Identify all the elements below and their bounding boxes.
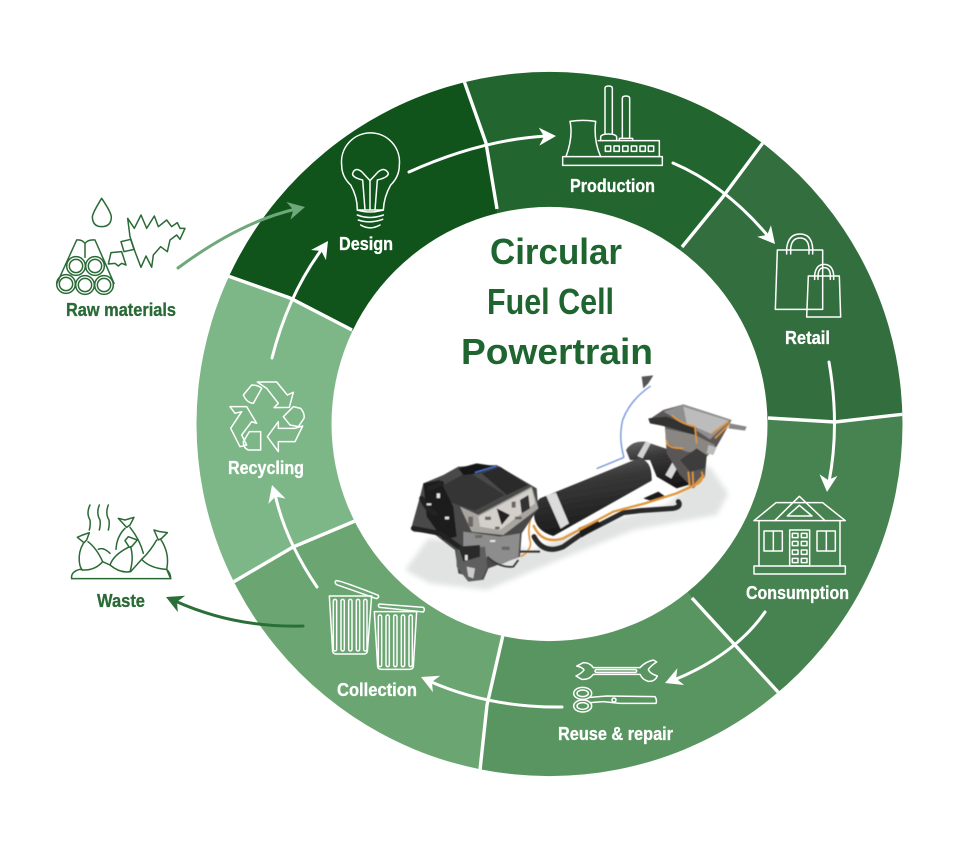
icon: house <box>754 496 845 574</box>
arrow: design to production <box>409 127 556 172</box>
label: waste: Waste <box>97 591 145 611</box>
segment: collection <box>234 521 502 770</box>
label: production: Production <box>570 176 655 196</box>
arrow: collection to recycling <box>263 482 317 587</box>
icon: waste bags <box>72 505 171 579</box>
title: Fuel Cell <box>487 281 614 322</box>
arrow: production to retail <box>673 163 782 250</box>
stage: production <box>563 86 662 196</box>
icon: trash bins <box>329 581 424 669</box>
fuel cell powertrain illustration <box>405 375 747 590</box>
stage: collection <box>329 581 424 700</box>
arrow: recycling to design <box>272 236 335 358</box>
icon: recycling symbol <box>230 382 304 452</box>
stage: raw materials <box>57 198 185 320</box>
segment: reuse and repair <box>480 592 778 776</box>
label: raw materials: Raw materials <box>66 300 176 320</box>
engine mass <box>412 465 538 580</box>
icon: raw materials <box>57 198 185 294</box>
arrow: raw materials to design <box>178 198 307 268</box>
icon: wrench and scissors <box>574 660 657 712</box>
icon: factory <box>563 86 662 165</box>
label: collection: Collection <box>337 680 417 700</box>
stage: reuse and repair <box>558 660 673 744</box>
stage: waste <box>72 505 171 611</box>
segment: recycling <box>196 276 354 582</box>
segment: retail <box>680 143 902 420</box>
segment: production <box>464 72 762 250</box>
segment: consumption <box>687 414 902 692</box>
title: Powertrain <box>461 331 653 372</box>
icon: shopping bags <box>775 234 841 317</box>
label: retail: Retail <box>785 328 830 348</box>
arrow: reuse to collection <box>417 669 562 707</box>
stage: recycling <box>228 382 304 478</box>
label: design: Design <box>339 234 393 254</box>
stage: retail <box>775 234 841 348</box>
title: Circular <box>490 231 622 272</box>
label: recycling: Recycling <box>228 458 304 478</box>
circular ring of lifecycle stages <box>196 72 902 776</box>
arrow: consumption to reuse <box>662 612 765 691</box>
title <box>461 231 653 372</box>
label: consumption: Consumption <box>746 583 849 603</box>
stack mass <box>648 404 732 488</box>
arrow: retail to consumption <box>818 362 837 493</box>
arrow: collection to waste <box>162 589 303 626</box>
label: reuse and repair: Reuse & repair <box>558 724 673 744</box>
segment: design <box>229 82 498 330</box>
stage: design <box>339 133 399 254</box>
stage: consumption <box>746 496 849 603</box>
icon: light bulb <box>341 133 399 228</box>
